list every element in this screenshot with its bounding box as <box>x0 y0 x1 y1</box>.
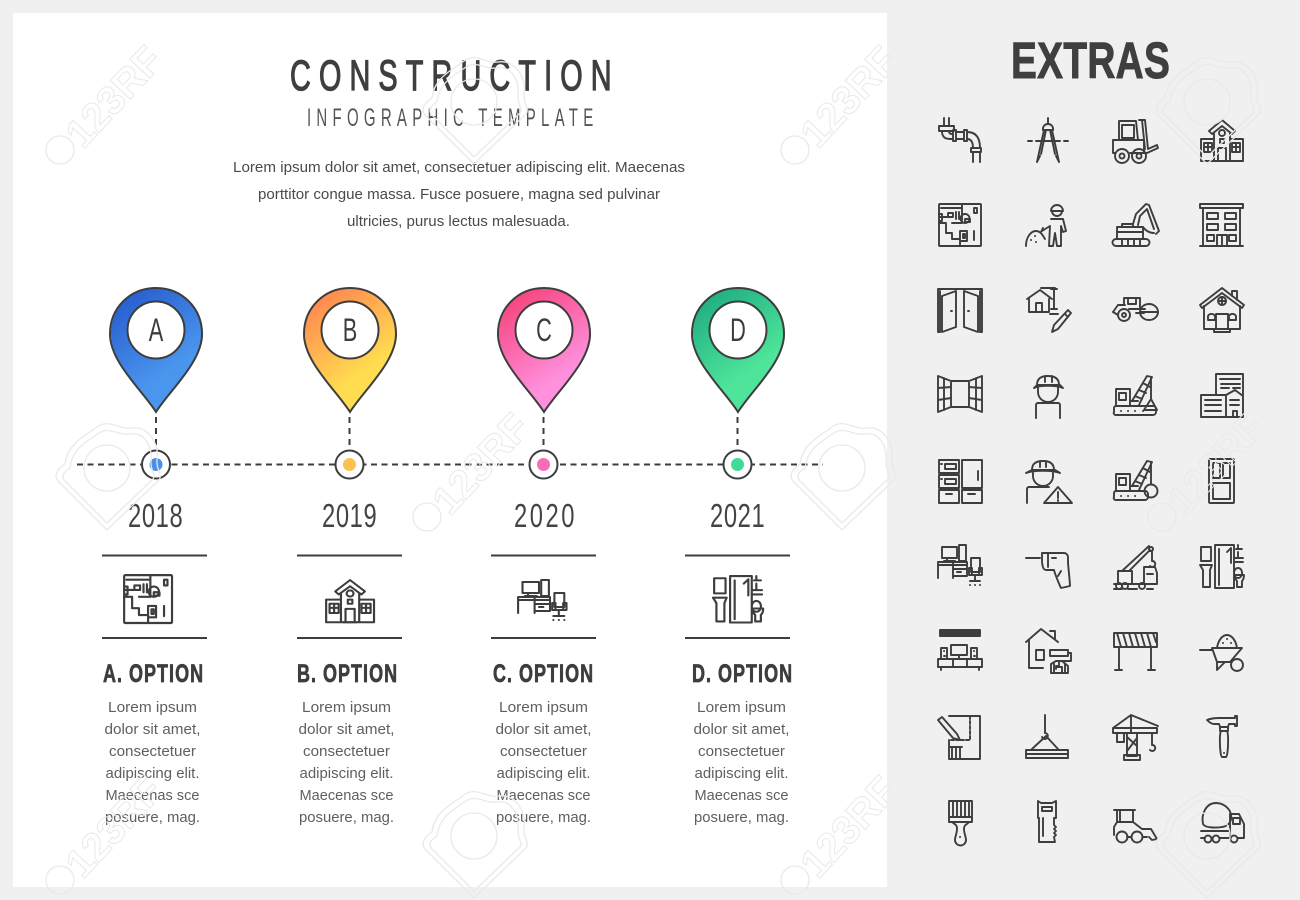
watermarks: 123RF <box>1159 405 1273 523</box>
column B rules and icon <box>297 556 402 638</box>
icon: crawler crane <box>1114 376 1157 415</box>
icon: tower crane <box>1113 715 1158 760</box>
watermarks: 123RF <box>424 405 538 523</box>
intro text <box>233 159 685 230</box>
pin B <box>304 288 397 412</box>
icon: cabinet door <box>1209 459 1234 503</box>
watermarks: 123RF <box>57 768 171 886</box>
option B text: posuere, mag. <box>299 810 394 826</box>
year 2021: 2021 <box>710 498 765 535</box>
icon: worker warning <box>1026 461 1072 503</box>
option D text: adipiscing elit. <box>694 766 788 782</box>
icon: compass <box>1028 118 1068 162</box>
year 2018: 2018 <box>128 498 183 535</box>
icon: school <box>1201 120 1243 161</box>
intro text: Lorem ipsum dolor sit amet, consectetuer adipiscing elit. Maecenas <box>233 159 685 176</box>
icon: office desk <box>938 545 982 585</box>
option C text: adipiscing elit. <box>496 766 590 782</box>
option C text <box>496 700 592 826</box>
option C text: consectetuer <box>500 744 587 760</box>
option A text: adipiscing elit. <box>106 766 200 782</box>
option D text <box>694 700 790 826</box>
panel: main timeline <box>13 13 887 887</box>
marker 2018 <box>142 417 170 478</box>
column C rules and icon <box>491 556 596 638</box>
icon: excavator <box>1112 204 1159 246</box>
icon: bathroom <box>1200 545 1244 588</box>
panel: extras icon grid <box>938 118 1244 846</box>
timeline line <box>77 464 823 466</box>
option B text <box>298 700 394 826</box>
icon: crane hook with beam <box>1026 715 1068 758</box>
icon: hammer <box>1207 716 1237 757</box>
icon: concrete mixer <box>1201 803 1244 842</box>
option B text: Lorem ipsum <box>302 700 391 716</box>
option C text: Maecenas sce <box>496 788 590 804</box>
option C title: C. OPTION <box>493 659 593 688</box>
marker 2021 <box>724 417 752 478</box>
marker 2019 <box>336 417 364 478</box>
pin C: C <box>536 312 552 348</box>
intro text: porttitor congue massa. Fusce posuere, magna sed pulvinar <box>258 186 660 203</box>
option C text: dolor sit amet, <box>496 722 592 738</box>
icon: open window <box>938 376 982 412</box>
option B title: B. OPTION <box>297 659 397 688</box>
pin A: A <box>149 312 164 348</box>
option B text: adipiscing elit. <box>300 766 394 782</box>
column A rules and icon <box>102 556 207 638</box>
icon: house painting <box>1026 629 1071 673</box>
icon: tv stand <box>938 630 982 670</box>
pin D <box>692 288 785 412</box>
pin D: D <box>730 312 746 348</box>
option A text: Maecenas sce <box>106 788 200 804</box>
option A title: A. OPTION <box>103 659 203 688</box>
intro text: ultricies, purus lectus malesuada. <box>347 213 570 230</box>
icon: road barrier <box>1114 633 1157 670</box>
option D text: dolor sit amet, <box>694 722 790 738</box>
option A text: posuere, mag. <box>105 810 200 826</box>
option D text: Maecenas sce <box>694 788 788 804</box>
icon: wrecking crane <box>1114 461 1158 500</box>
marker 2020 <box>530 417 558 478</box>
icon: wheelbarrow <box>1200 635 1243 671</box>
pin A <box>110 288 203 412</box>
icon: kitchen cabinets <box>939 460 982 503</box>
icon: paint brush <box>949 801 972 846</box>
watermarks: 123RF <box>792 768 906 886</box>
icon: mobile crane <box>1114 546 1157 589</box>
option C text: Lorem ipsum <box>499 700 588 716</box>
extras heading: EXTRAS <box>1011 32 1170 89</box>
option A text: consectetuer <box>109 744 196 760</box>
option B text: consectetuer <box>303 744 390 760</box>
icon: double door <box>938 289 982 332</box>
option D title: D. OPTION <box>692 659 792 688</box>
icon: pipe <box>939 118 981 162</box>
icon: power drill <box>1026 553 1070 588</box>
watermarks: 123RF <box>57 38 171 156</box>
icon: forklift <box>1113 120 1158 163</box>
option A text: Lorem ipsum <box>108 700 197 716</box>
pin B: B <box>343 312 357 348</box>
icon: road roller <box>1113 298 1158 321</box>
option D text: posuere, mag. <box>694 810 789 826</box>
icon: hand saw <box>1038 801 1056 842</box>
icon: bulldozer <box>1114 810 1157 842</box>
icon: worker with helmet <box>1034 376 1063 418</box>
icon: worker shovelling <box>1026 205 1066 246</box>
title: CONSTRUCTION <box>290 51 612 99</box>
year 2020: 2020 <box>514 498 574 535</box>
icon: floor plan <box>939 204 981 246</box>
option D text: consectetuer <box>698 744 785 760</box>
subtitle: INFOGRAPHIC TEMPLATE <box>307 104 593 132</box>
option C text: posuere, mag. <box>496 810 591 826</box>
icon: house plan with pencil <box>1027 288 1071 332</box>
icon: office buildings <box>1201 374 1243 417</box>
option D text: Lorem ipsum <box>697 700 786 716</box>
icon: apartment block <box>1200 204 1243 246</box>
option A text: dolor sit amet, <box>104 722 200 738</box>
icon: blueprint <box>938 716 980 759</box>
watermarks: 123RF <box>792 38 906 156</box>
option B text: Maecenas sce <box>300 788 394 804</box>
column D rules and icon <box>685 556 790 638</box>
year 2019: 2019 <box>322 498 377 535</box>
pin C <box>498 288 591 412</box>
option A text <box>104 700 200 826</box>
icon: house <box>1200 288 1244 332</box>
option B text: dolor sit amet, <box>298 722 394 738</box>
